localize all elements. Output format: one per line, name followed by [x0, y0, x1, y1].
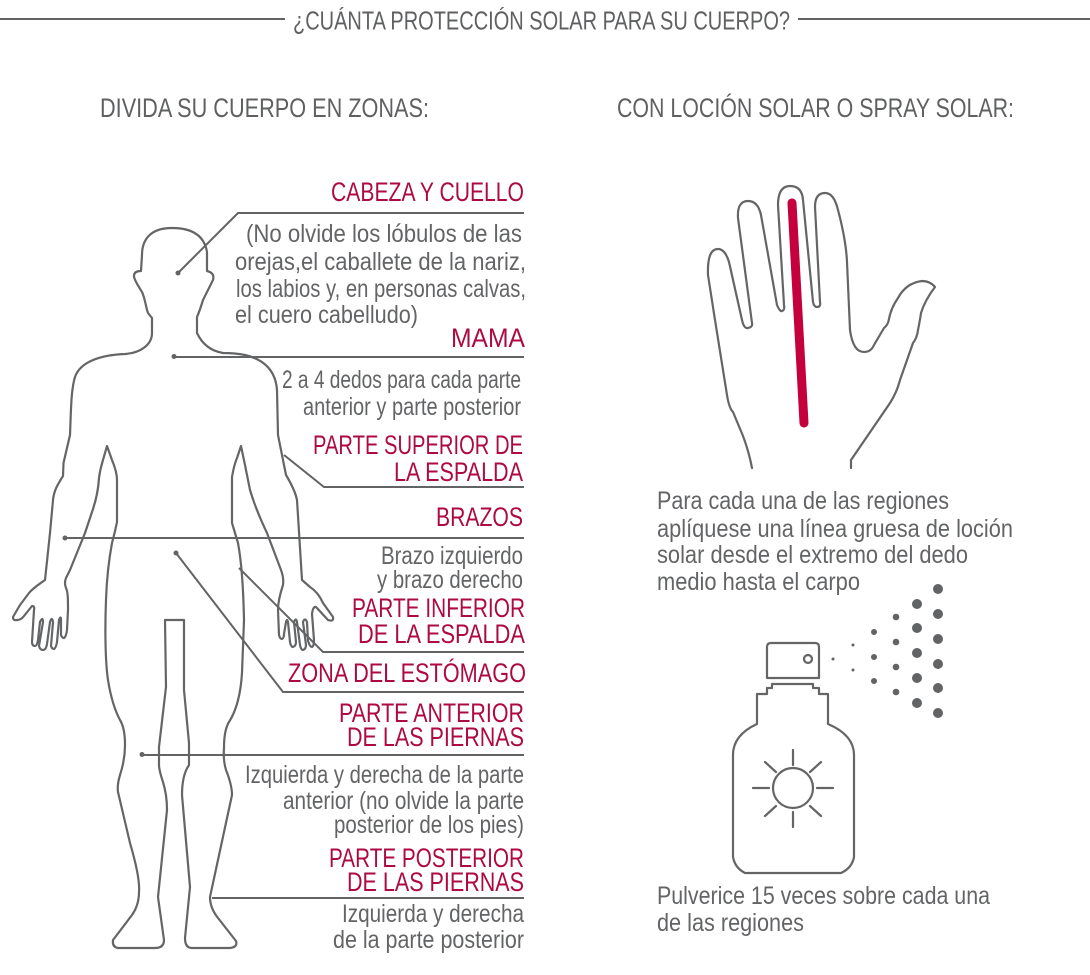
zone: parte inferior de la espalda: DE LA ESPALDA: [358, 619, 525, 649]
zone: parte posterior de las piernas: DE LAS PIERNAS: [347, 867, 524, 897]
zone: cabeza y cuello: el cuero cabelludo): [235, 301, 418, 329]
zone: brazos: BRAZOS: [436, 502, 523, 532]
text: lotion instructions: Para cada una de las regiones: [657, 487, 949, 515]
icon: sun: [753, 750, 833, 827]
zone: mama: [172, 323, 525, 421]
text: lotion instructions: medio hasta el carpo: [657, 568, 860, 596]
text: spray instructions: de las regiones: [657, 909, 804, 937]
panel: body zones: [13, 177, 526, 954]
zone: cabeza y cuello: orejas,el caballete de la nariz,: [235, 248, 526, 276]
zone: zona del estomago: ZONA DEL ESTÓMAGO: [288, 657, 526, 688]
zone: zona del estomago: [174, 550, 526, 692]
zone: parte anterior de las piernas: anterior (no olvide la parte: [283, 787, 524, 815]
zone: parte anterior de las piernas: posterior de los pies): [334, 811, 524, 839]
zone: parte anterior de las piernas: PARTE ANTERIOR: [339, 698, 524, 728]
text: lotion instructions: aplíquese una línea gruesa de loción: [657, 515, 1013, 543]
title: ¿CUÁNTA PROTECCIÓN SOLAR PARA SU CUERPO?: [293, 6, 790, 36]
zone: brazos: [62, 502, 524, 594]
panel: lotion: [657, 186, 1013, 596]
icon: spray droplets: [832, 584, 943, 718]
zone: parte posterior de las piernas: [212, 843, 524, 954]
zone: parte superior de la espalda: [284, 430, 524, 487]
zone: parte posterior de las piernas: PARTE POSTERIOR: [329, 843, 524, 873]
panel: spray: [657, 584, 990, 937]
zone: cabeza y cuello: (No olvide los lóbulos de las: [246, 220, 522, 248]
icon: spray bottle: [733, 643, 854, 873]
icon: hand with lotion line: [708, 186, 935, 468]
zone: parte anterior de las piernas: [140, 698, 524, 839]
zone: brazos: Brazo izquierdo: [381, 542, 523, 570]
zone: parte anterior de las piernas: DE LAS PIERNAS: [347, 722, 524, 752]
icon: body outline: [13, 228, 333, 948]
zone: mama: MAMA: [451, 323, 525, 353]
zone: cabeza y cuello: los labios y, en personas calvas,: [236, 275, 526, 303]
text: lotion instructions: [657, 487, 1013, 596]
zone: cabeza y cuello: [176, 177, 526, 329]
zone: parte superior de la espalda: PARTE SUPERIOR DE: [313, 430, 523, 460]
text: lotion instructions: solar desde el extremo del dedo: [657, 541, 968, 569]
text: spray instructions: [657, 882, 990, 937]
zone: parte anterior de las piernas: Izquierda y derecha de la parte: [245, 761, 524, 789]
zone: cabeza y cuello: CABEZA Y CUELLO: [331, 177, 524, 207]
text: spray instructions: Pulverice 15 veces sobre cada una: [657, 882, 990, 910]
zone: parte superior de la espalda: LA ESPALDA: [394, 457, 523, 487]
zone: mama: 2 a 4 dedos para cada parte: [282, 366, 521, 394]
zone: mama: anterior y parte posterior: [303, 393, 521, 421]
zone: parte inferior de la espalda: [239, 568, 525, 652]
heading: left column: DIVIDA SU CUERPO EN ZONAS:: [100, 93, 429, 123]
zone: brazos: y brazo derecho: [377, 566, 523, 594]
zone: parte posterior de las piernas: Izquierda y derecha: [342, 900, 524, 928]
zone: parte inferior de la espalda: PARTE INFERIOR: [352, 593, 525, 623]
zone: parte posterior de las piernas: de la parte posterior: [333, 926, 524, 954]
